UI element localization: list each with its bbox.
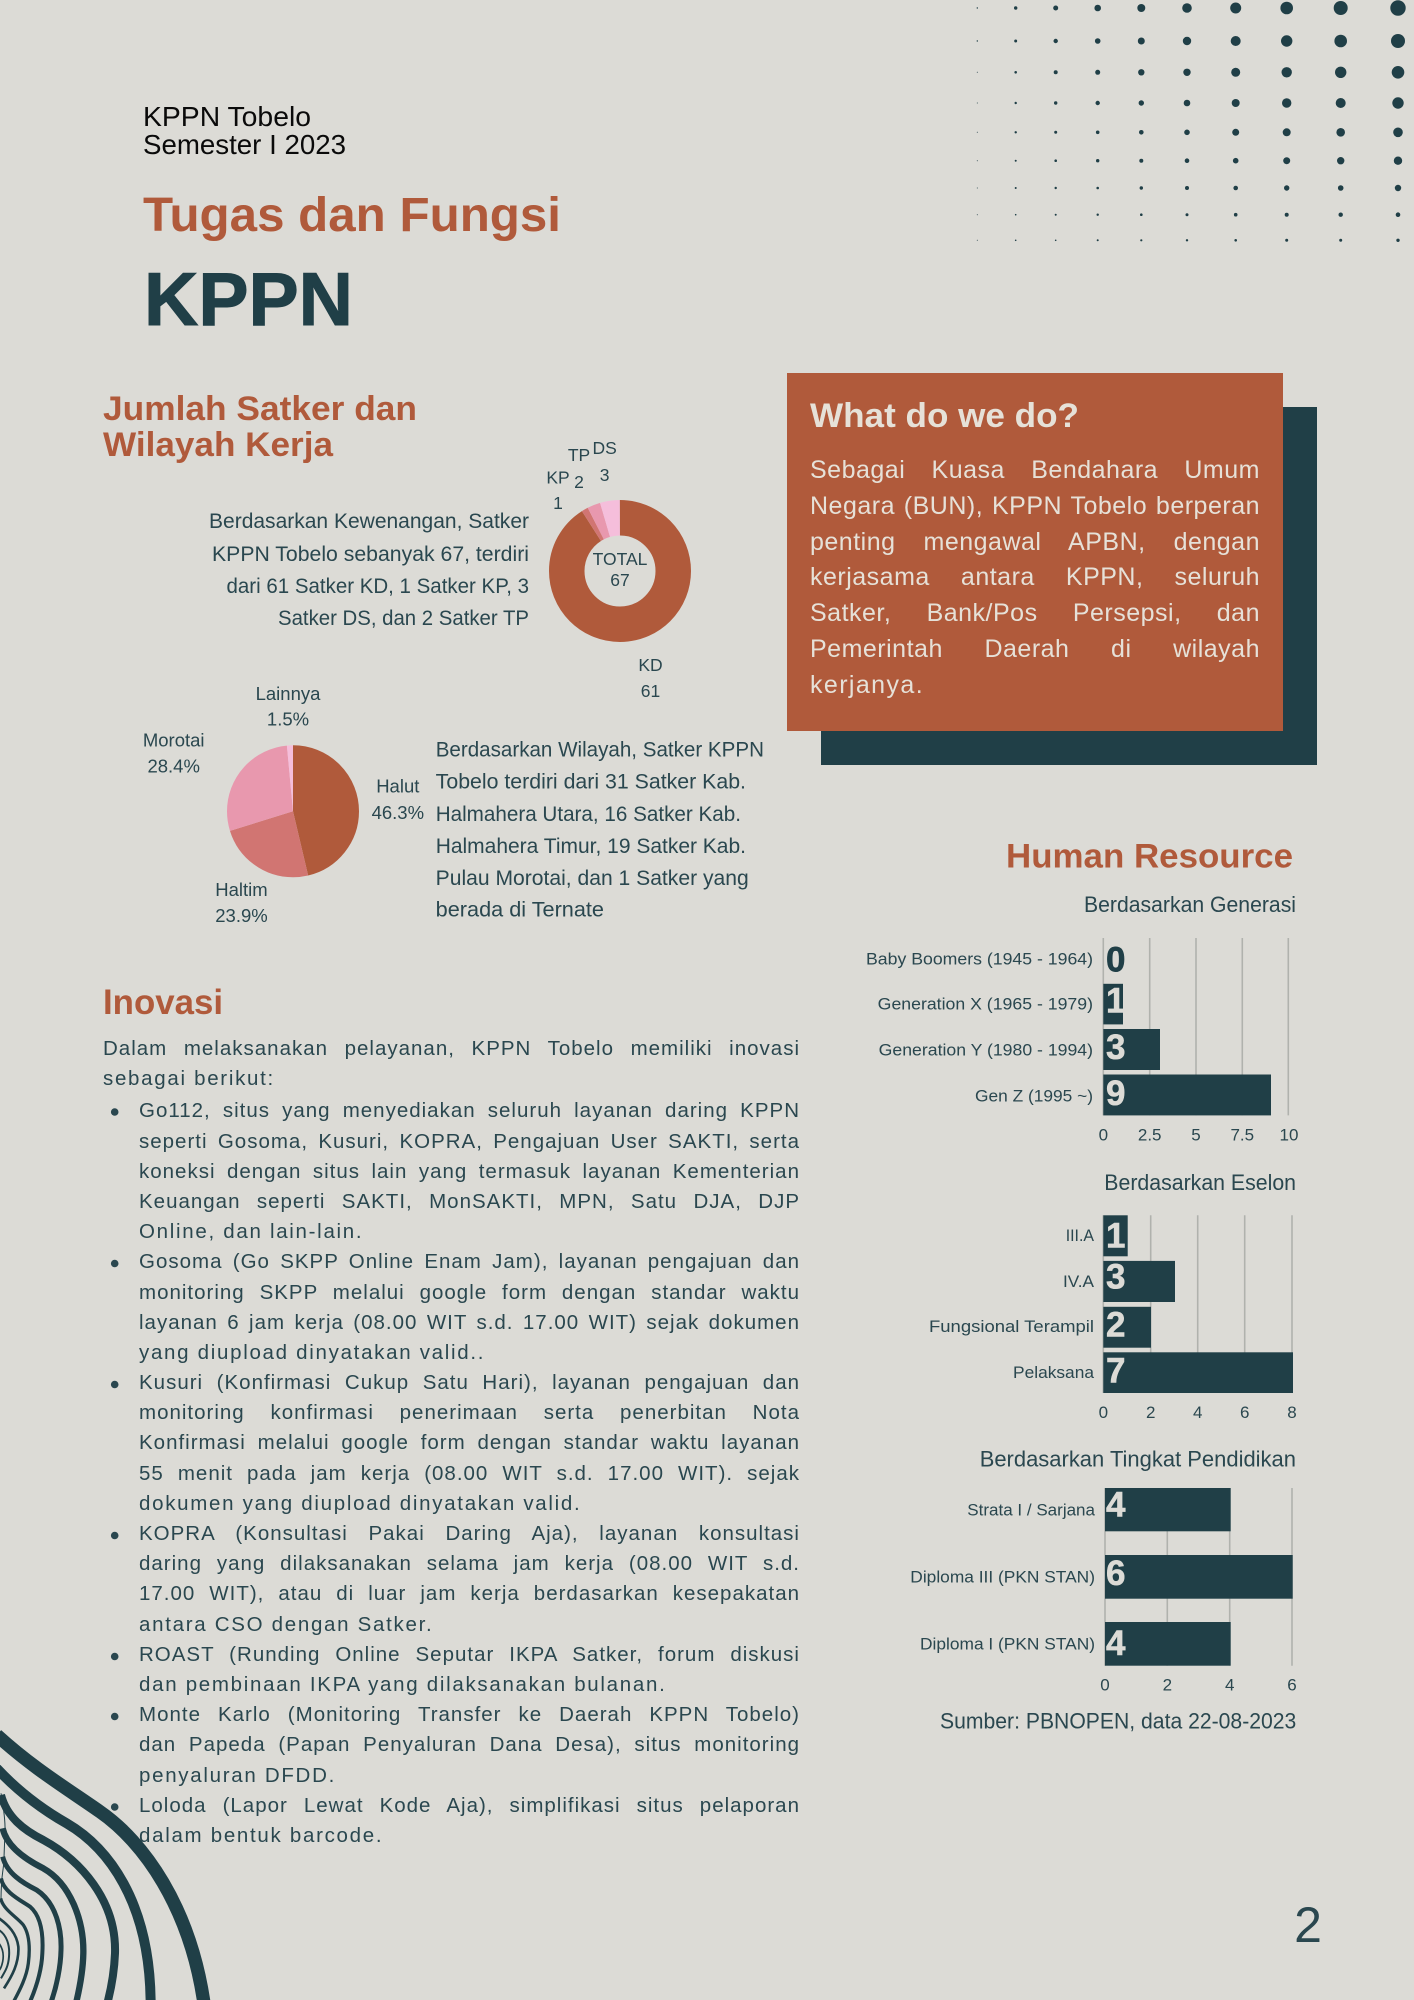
text block: innovation list: dalam bentuk barcode. xyxy=(139,1824,383,1847)
subheading: Berdasarkan Eselon: Berdasarkan Eselon xyxy=(1104,1170,1296,1195)
bar chart: education level: Diploma I (PKN STAN) xyxy=(920,1634,1095,1653)
pie chart: satker by region: Morotai xyxy=(143,730,205,751)
bar chart: echelon: 1 xyxy=(1106,1216,1125,1256)
text block: innovation list: Monte Karlo (Monitoring Transfer ke Daerah KPPN Tobelo) xyxy=(139,1703,800,1726)
header: office and period xyxy=(143,101,346,160)
bar chart: echelon: Pelaksana xyxy=(1013,1363,1095,1382)
pie chart: satker by region xyxy=(143,683,424,926)
pie chart: satker by region: 1.5% xyxy=(267,709,309,730)
bar chart: generation: 3 xyxy=(1106,1028,1125,1067)
bar chart: generation: Gen Z (1995 ~) xyxy=(975,1086,1093,1105)
text block: card paragraph: Negara (BUN), KPPN Tobelo berperan xyxy=(810,492,1260,520)
text block: innovation list: Konfirmasi melalui google form dengan standar waktu layanan xyxy=(139,1431,800,1454)
text: satker by region: Halmahera Utara, 16 Satker Kab. xyxy=(436,803,741,826)
text block: card paragraph: Sebagai Kuasa Bendahara Umum xyxy=(810,456,1260,484)
bar chart: echelon: 3 xyxy=(1106,1257,1125,1296)
bar chart: education level: 4 xyxy=(1106,1624,1126,1663)
text block: innovation list: sebagai berikut: xyxy=(103,1067,275,1090)
bar chart: echelon: 6 xyxy=(1240,1403,1249,1422)
header: office and period: Semester I 2023 xyxy=(143,129,346,160)
text block: innovation list: 55 menit pada jam kerja (08.00 WIT s.d. 17.00 WIT). sejak xyxy=(139,1462,800,1485)
heading: Inovasi: Inovasi xyxy=(103,983,223,1022)
text block: innovation list: daring yang dilaksanakan selama jam kerja (08.00 WIT s.d. xyxy=(139,1552,800,1575)
title: KPPN: KPPN xyxy=(144,257,353,341)
donut chart: satker by authority: 2 xyxy=(574,472,584,492)
text block: innovation list: penyaluran DFDD. xyxy=(139,1764,336,1786)
bar chart: echelon: III.A xyxy=(1066,1226,1095,1245)
bar chart: generation: 9 xyxy=(1106,1074,1125,1113)
bar chart: echelon: 7 xyxy=(1106,1352,1125,1391)
text block: innovation list xyxy=(103,1037,800,1847)
text: satker by region: Tobelo terdiri dari 31 Satker Kab. xyxy=(436,771,746,794)
text block: innovation list: ROAST (Runding Online Seputar IKPA Satker, forum diskusi xyxy=(139,1643,800,1666)
donut chart: satker by authority: 1 xyxy=(553,493,563,513)
bar chart: education level: 6 xyxy=(1287,1676,1297,1695)
text block: innovation list: KOPRA (Konsultasi Pakai Daring Aja), layanan konsultasi xyxy=(139,1522,800,1545)
bar chart: generation: 2.5 xyxy=(1138,1126,1162,1145)
bar chart: echelon xyxy=(929,1215,1297,1422)
panel: What do we do card xyxy=(787,373,1283,731)
bar chart: education level: 4 xyxy=(1225,1676,1234,1695)
pie chart: satker by region: 28.4% xyxy=(147,756,200,777)
pie chart: satker by region: Halut xyxy=(376,776,419,797)
text block: innovation list: monitoring konfirmasi penerimaan serta penerbitan Nota xyxy=(139,1401,800,1424)
pie chart: satker by region: 23.9% xyxy=(215,905,268,926)
text block: innovation list: Kusuri (Konfirmasi Cukup Satu Hari), layanan pengajuan dan xyxy=(139,1371,800,1394)
donut chart: satker by authority: KP xyxy=(546,468,570,488)
bar chart: education level: 0 xyxy=(1100,1676,1110,1695)
header: office and period: KPPN Tobelo xyxy=(143,101,311,132)
text: satker by region: Pulau Morotai, dan 1 Satker yang xyxy=(436,867,749,890)
donut chart: satker by authority: 3 xyxy=(600,465,609,485)
bar chart: echelon: 8 xyxy=(1287,1403,1297,1422)
bar chart: education level: 6 xyxy=(1106,1554,1125,1593)
text block: innovation list: Loloda (Lapor Lewat Kode Aja), simplifikasi situs pelaporan xyxy=(139,1794,800,1817)
bar chart: education level: 2 xyxy=(1163,1676,1172,1695)
text block: innovation list: yang diupload dinyatakan valid.. xyxy=(139,1341,485,1364)
page number: 2 xyxy=(1294,1897,1322,1953)
text block: card paragraph: Pemerintah Daerah di wilayah xyxy=(810,635,1260,663)
subheading: Berdasarkan Generasi: Berdasarkan Generasi xyxy=(1084,892,1296,917)
heading: Jumlah Satker dan Wilayah Kerja: Jumlah Satker dan xyxy=(103,390,417,428)
text: satker by authority: Berdasarkan Kewenangan, Satker xyxy=(209,510,529,533)
text: satker by authority: dari 61 Satker KD, 1 Satker KP, 3 xyxy=(226,575,529,598)
bar chart: generation: 1 xyxy=(1106,982,1125,1020)
text: satker by region xyxy=(436,739,764,922)
donut chart: satker by authority: 61 xyxy=(641,681,660,701)
text block: card paragraph: kerjasama antara KPPN, seluruh xyxy=(810,563,1260,591)
heading: Jumlah Satker dan Wilayah Kerja xyxy=(103,390,417,464)
text block: card paragraph: penting mengawal APBN, dengan xyxy=(810,528,1260,556)
text block: innovation list: 17.00 WIT), atau di luar jam kerja berdasarkan kesepakatan xyxy=(139,1582,800,1605)
text block: innovation list: monitoring SKPP melalui google form dengan standar waktu xyxy=(139,1280,800,1304)
decoration: halftone dot grid xyxy=(977,0,1406,242)
donut chart: satker by authority: TOTAL xyxy=(593,549,648,569)
heading: Jumlah Satker dan Wilayah Kerja: Wilayah Kerja xyxy=(103,426,334,464)
text block: innovation list: antara CSO dengan Satker. xyxy=(139,1613,433,1636)
bar chart: education level xyxy=(910,1486,1297,1695)
text block: innovation list: koneksi dengan situs lain yang termasuk layanan Kementerian xyxy=(139,1160,800,1183)
heading: Human Resource: Human Resource xyxy=(1006,838,1293,876)
bar chart: education level: 4 xyxy=(1106,1486,1126,1525)
text block: innovation list: dokumen yang diupload dinyatakan valid. xyxy=(139,1492,581,1515)
donut chart: satker by authority: 67 xyxy=(610,570,630,590)
title: Tugas dan Fungsi: Tugas dan Fungsi xyxy=(143,189,561,242)
pie chart: satker by region: Lainnya xyxy=(256,683,321,704)
text: satker by region: Berdasarkan Wilayah, Satker KPPN xyxy=(436,739,764,762)
bar chart: education level: Diploma III (PKN STAN) xyxy=(910,1567,1095,1586)
bar chart: generation: Generation Y (1980 - 1994) xyxy=(879,1040,1093,1059)
decoration: contour swirl bottom left xyxy=(0,1735,204,2000)
text block: card paragraph: kerjanya. xyxy=(810,671,924,699)
text: satker by authority xyxy=(209,510,529,630)
bar chart: generation: Baby Boomers (1945 - 1964) xyxy=(866,950,1093,969)
text block: innovation list: layanan 6 jam kerja (08.00 WIT s.d. 17.00 WIT) sejak dokumen xyxy=(139,1311,800,1334)
bar chart: generation: Generation X (1965 - 1979) xyxy=(878,994,1093,1013)
bar chart: echelon: Fungsional Terampil xyxy=(929,1317,1094,1336)
text: satker by authority: Satker DS, dan 2 Satker TP xyxy=(278,607,529,630)
bar chart: generation: 0 xyxy=(1099,1126,1108,1145)
text block: innovation list: Online, dan lain-lain. xyxy=(139,1220,363,1243)
bar chart: echelon: 2 xyxy=(1106,1306,1125,1345)
text block: innovation list: Keuangan seperti SAKTI, MonSAKTI, MPN, Satu DJA, DJP xyxy=(139,1190,800,1213)
bar chart: echelon: 4 xyxy=(1193,1403,1202,1422)
text block: innovation list: Go112, situs yang menyediakan seluruh layanan daring KPPN xyxy=(139,1099,800,1122)
panel: shadow of What do we do card xyxy=(821,407,1317,765)
text block: innovation list: dan pembinaan IKPA yang dilaksanakan bulanan. xyxy=(139,1673,666,1696)
bar chart: generation: 10 xyxy=(1280,1126,1298,1145)
text block: innovation list: dan Papeda (Papan Penyaluran Dana Desa), situs monitoring xyxy=(139,1733,800,1756)
bar chart: generation: 5 xyxy=(1191,1126,1201,1145)
pie chart: satker by region: 46.3% xyxy=(372,802,424,823)
text: satker by region: berada di Ternate xyxy=(436,899,604,922)
bullets of the innovation list xyxy=(111,1108,118,1811)
donut chart: satker by authority xyxy=(546,438,673,701)
text: satker by region: Halmahera Timur, 19 Satker Kab. xyxy=(436,835,746,858)
bar chart: generation: 0 xyxy=(1106,940,1125,980)
source note: Sumber: PBNOPEN, data 22-08-2023 xyxy=(940,1708,1296,1733)
pie chart: satker by region: Haltim xyxy=(215,879,268,900)
donut chart: satker by authority: TP xyxy=(568,445,590,465)
bar chart: generation: 7.5 xyxy=(1230,1126,1254,1145)
bar chart: echelon: 2 xyxy=(1146,1403,1155,1422)
subheading: Berdasarkan Tingkat Pendidikan: Berdasarkan Tingkat Pendidikan xyxy=(980,1447,1296,1472)
bar chart: echelon: 0 xyxy=(1099,1403,1108,1422)
donut chart: satker by authority: DS xyxy=(592,438,617,458)
text block: innovation list: Dalam melaksanakan pelayanan, KPPN Tobelo memiliki inovasi xyxy=(103,1037,800,1060)
bar chart: generation xyxy=(866,938,1298,1145)
text: satker by authority: KPPN Tobelo sebanyak 67, terdiri xyxy=(212,543,529,566)
card heading: What do we do? xyxy=(810,397,1079,435)
donut chart: satker by authority: KD xyxy=(638,655,663,675)
bar chart: echelon: IV.A xyxy=(1063,1272,1095,1291)
text block: card paragraph: Satker, Bank/Pos Persepsi, dan xyxy=(810,599,1260,627)
text block: innovation list: Gosoma (Go SKPP Online Enam Jam), layanan pengajuan dan xyxy=(139,1250,800,1273)
text block: card paragraph xyxy=(810,456,1260,699)
bar chart: education level: Strata I / Sarjana xyxy=(967,1500,1096,1519)
text block: innovation list: seperti Gosoma, Kusuri, KOPRA, Pengajuan User SAKTI, serta xyxy=(139,1130,800,1153)
